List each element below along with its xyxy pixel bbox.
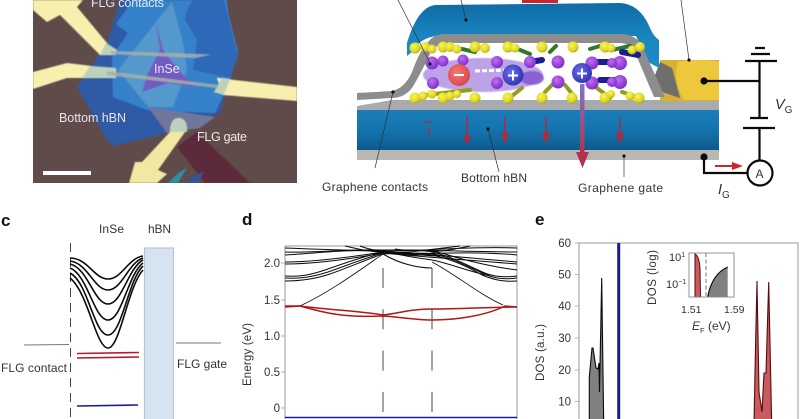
graphene gate layer xyxy=(357,150,719,160)
label: InSe column: InSe xyxy=(99,222,124,236)
gold contact xyxy=(650,60,719,101)
molecular sticks xyxy=(425,46,640,98)
inset fills xyxy=(695,254,700,297)
hole xyxy=(502,64,524,86)
frame xyxy=(285,246,517,419)
bottom hBN slab xyxy=(357,110,719,150)
grey lower overlap xyxy=(148,107,215,133)
conduction subbands xyxy=(70,256,143,348)
tick labels xyxy=(264,258,280,415)
inset dashed line xyxy=(705,253,707,297)
circuit xyxy=(700,48,777,186)
big tunnelling arrow xyxy=(576,84,589,168)
panel d heading: d xyxy=(242,210,252,229)
tick labels: 60 xyxy=(558,238,571,250)
panel d: band structure xyxy=(242,246,517,419)
leader dots xyxy=(391,18,691,158)
tick labels xyxy=(558,238,571,408)
tick labels: 10 xyxy=(558,396,571,408)
red bands xyxy=(77,352,139,358)
yellow atoms bottom xyxy=(410,90,644,104)
contact Fermi level xyxy=(24,344,69,346)
tick labels: 20 xyxy=(558,365,571,377)
hBN barrier xyxy=(144,248,174,419)
inset: −1 xyxy=(678,279,686,286)
label: Graphene gate: Graphene gate xyxy=(578,181,663,195)
gate Fermi level xyxy=(176,342,221,344)
symmetry dashed lines xyxy=(383,268,432,417)
label: IG: I xyxy=(718,182,722,198)
inset x title: E xyxy=(692,319,701,333)
label: IG: G xyxy=(722,190,730,201)
electron xyxy=(448,64,470,86)
left yellow contact xyxy=(33,63,92,89)
yellow atoms top xyxy=(410,42,645,54)
top graphene band xyxy=(357,34,665,100)
top hBN dome xyxy=(407,3,659,68)
tick labels: 2.0 xyxy=(264,258,280,270)
white bond stripes xyxy=(475,70,620,73)
label: VG: G xyxy=(785,105,793,116)
light triangular flake xyxy=(118,2,187,107)
blue band xyxy=(77,405,138,406)
bottom hBN flake xyxy=(77,0,233,146)
panel e heading: e xyxy=(535,210,544,229)
inset x title: (eV) xyxy=(705,319,731,333)
inset y title: DOS (log) xyxy=(647,250,659,305)
ammeter label: A xyxy=(756,167,764,181)
inset xyxy=(647,250,745,335)
y axis title: DOS (a.u.) xyxy=(535,324,547,381)
label: VG: V xyxy=(775,97,785,113)
upper hBN flake xyxy=(112,0,238,113)
label: Graphene contacts: Graphene contacts xyxy=(322,180,428,194)
inset frame xyxy=(689,253,734,297)
axis ticks xyxy=(281,263,285,408)
inset y labels: 1 xyxy=(681,252,685,259)
inset: 10 xyxy=(666,279,678,291)
panel c heading: c xyxy=(1,211,10,230)
tick labels: 1.0 xyxy=(264,331,280,343)
scale bar xyxy=(43,171,91,175)
graphene strips xyxy=(111,51,211,58)
panel e: density of states xyxy=(535,238,798,419)
red DOS peak xyxy=(754,281,772,419)
current arrow xyxy=(715,162,743,170)
red flat bands xyxy=(285,306,517,320)
panel b: device schematic xyxy=(357,0,719,177)
tick labels: 0 xyxy=(274,403,280,415)
label: Bottom hBN: Bottom hBN xyxy=(59,111,126,125)
exciton cloud xyxy=(423,58,544,92)
black DOS peak xyxy=(589,278,604,419)
panel a: device micrograph xyxy=(33,0,297,183)
label: FLG gate: FLG gate xyxy=(197,130,247,144)
contact overlap pads xyxy=(82,43,230,132)
teal fragment xyxy=(168,168,187,183)
inset x title: F xyxy=(700,326,705,335)
top-left yellow contact xyxy=(33,0,107,55)
dark substrate strip xyxy=(177,132,250,183)
contact dashed line xyxy=(70,243,72,419)
blue DOS line xyxy=(617,243,620,419)
lone dispersive bands xyxy=(300,254,503,306)
inset y labels: 10 xyxy=(669,252,681,264)
blue flat band xyxy=(285,416,517,418)
tick labels: 0.5 xyxy=(264,367,280,379)
inset: 1.59 xyxy=(724,304,745,316)
top gate electrode xyxy=(522,0,558,3)
label: InSe: InSe xyxy=(154,62,180,76)
panel c: band diagram xyxy=(1,222,227,419)
InSe purple flake xyxy=(142,22,196,92)
InSe surface plate xyxy=(357,100,719,110)
purple atoms xyxy=(426,54,627,90)
axis ticks xyxy=(575,243,579,402)
frame xyxy=(579,243,798,419)
small red arrows xyxy=(425,117,624,145)
label: Bottom hBN schematic: Bottom hBN xyxy=(461,171,527,185)
upper black bands xyxy=(285,246,517,281)
right yellow contact xyxy=(217,78,297,101)
tick labels: 30 xyxy=(558,333,571,345)
label: FLG contact: FLG contact xyxy=(1,361,68,375)
hole at gate xyxy=(572,63,592,83)
tick labels: 50 xyxy=(558,270,571,282)
dark blue overlap xyxy=(185,0,238,78)
y axis title: Energy (eV) xyxy=(242,323,254,386)
leader lines xyxy=(375,0,689,177)
tick labels: 1.5 xyxy=(264,295,280,307)
bottom yellow contact xyxy=(129,132,185,183)
tick labels: 40 xyxy=(558,301,571,313)
inset x labels: 1.51 xyxy=(681,304,702,316)
label: FLG gate: FLG gate xyxy=(177,357,227,371)
label: hBN column: hBN xyxy=(148,222,171,236)
